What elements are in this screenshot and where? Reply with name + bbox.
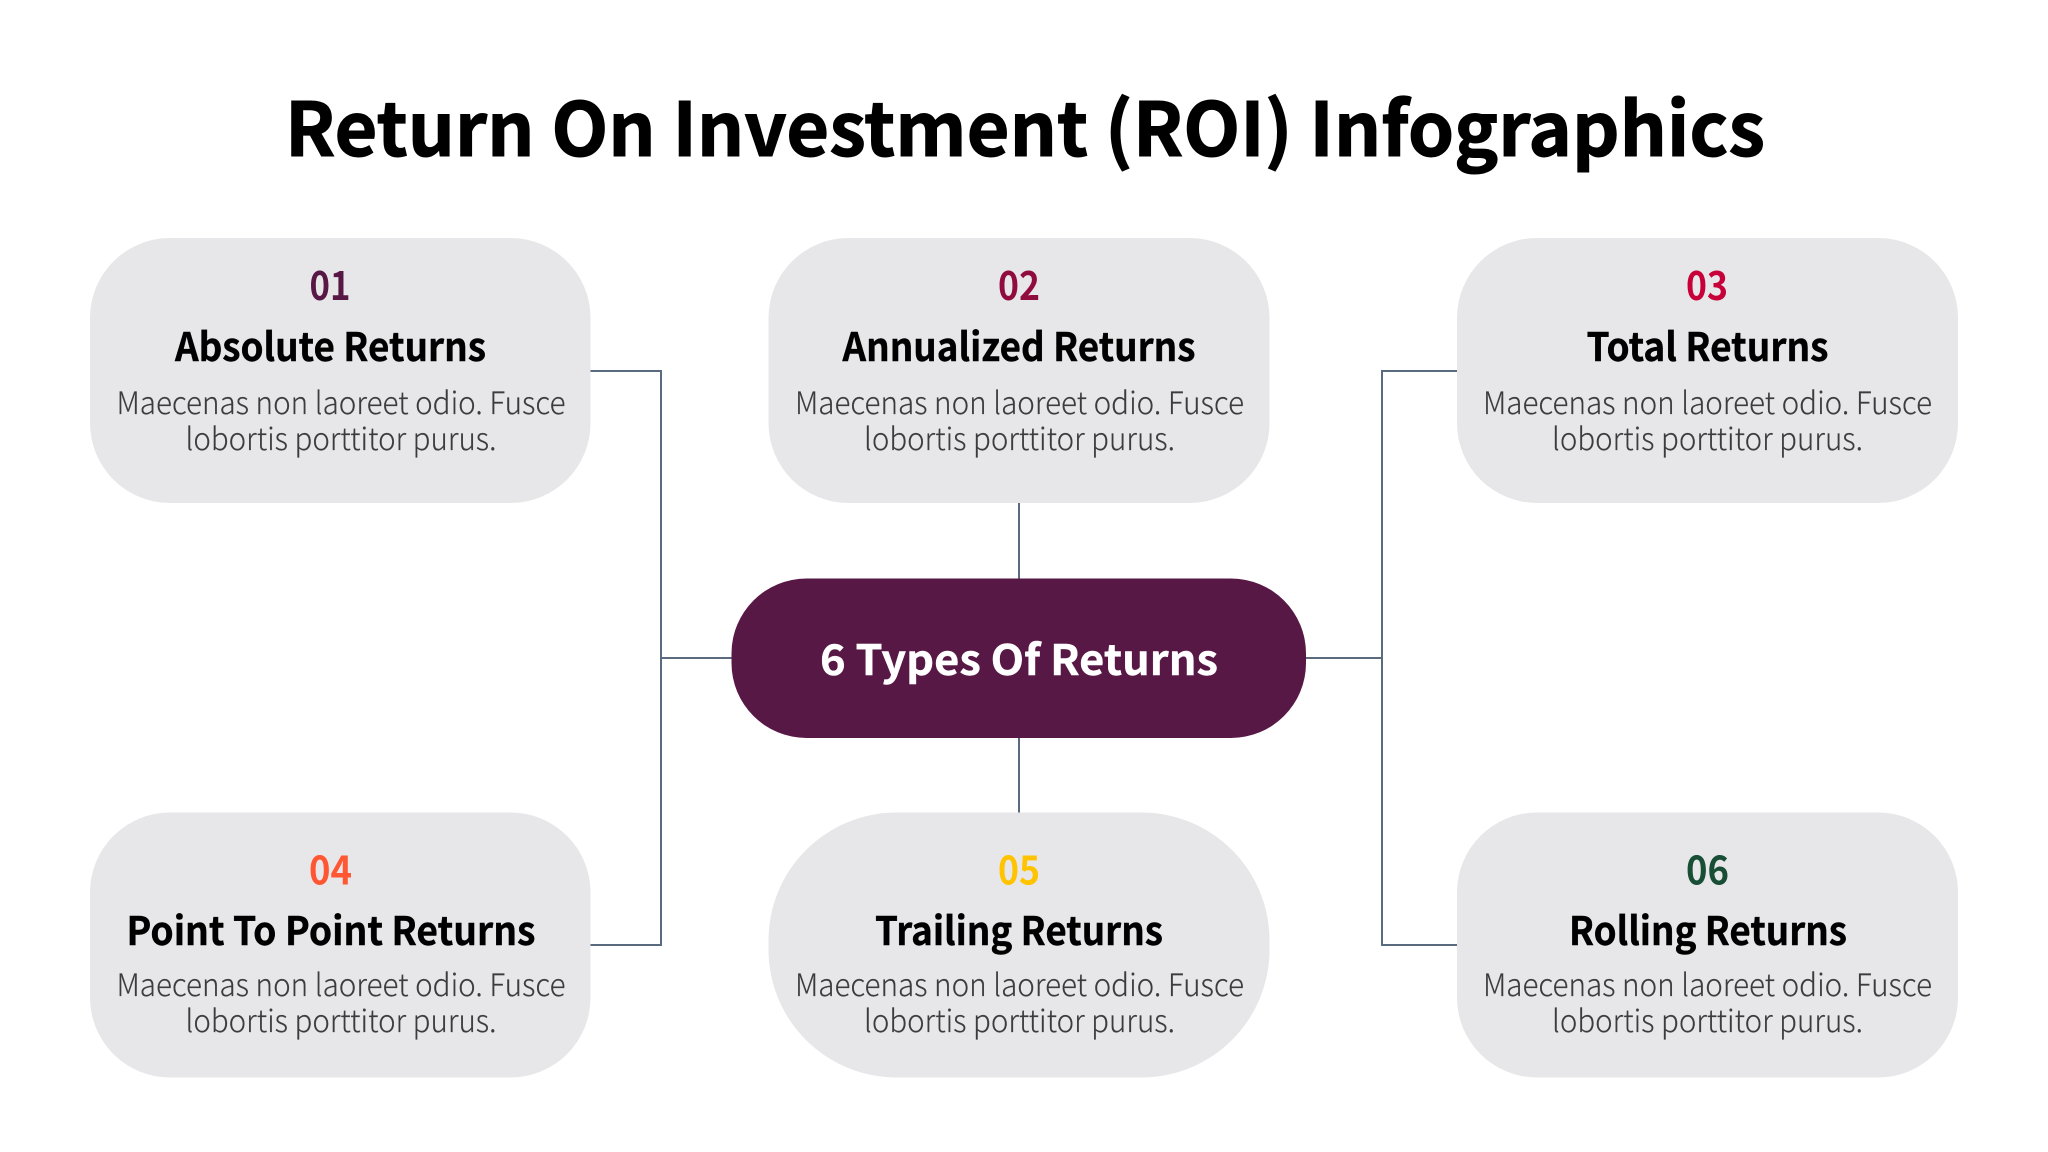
panel: 05 Trailing Returns xyxy=(768,812,1270,1078)
panel: 05 Trailing Returns: Trailing Returns xyxy=(875,901,1163,957)
panel: 01 Absolute Returns: Maecenas non laoreet odio. Fusce xyxy=(116,378,566,423)
panel: 01 Absolute Returns: lobortis porttitor purus. xyxy=(186,414,496,459)
panel: 04 Point To Point Returns xyxy=(90,812,590,1078)
connectors: left bracket xyxy=(590,371,732,945)
panel: 03 Total Returns: Maecenas non laoreet odio. Fusce xyxy=(1483,378,1932,423)
panel: 02 Annualized Returns xyxy=(768,238,1270,503)
panel: 03 Total Returns: Total Returns xyxy=(1586,317,1828,373)
panel: center 6 Types Of Returns: 6 Types Of Returns xyxy=(820,627,1218,688)
panel: 06 Rolling Returns: Maecenas non laoreet odio. Fusce xyxy=(1483,960,1932,1005)
connector: bottom vertical xyxy=(1018,738,1020,813)
panel: 01 Absolute Returns: Absolute Returns xyxy=(174,317,486,373)
panel: 06 Rolling Returns xyxy=(1457,812,1958,1078)
panel: 05 Trailing Returns: Maecenas non laoreet odio. Fusce xyxy=(795,960,1244,1005)
panel: 02 Annualized Returns: 02 xyxy=(998,254,1040,312)
connector: top vertical xyxy=(1018,503,1020,579)
panel: 05 Trailing Returns: lobortis porttitor purus. xyxy=(864,996,1175,1041)
panel: 06 Rolling Returns: 06 xyxy=(1686,838,1729,896)
panel: center 6 Types Of Returns xyxy=(732,578,1306,738)
panel: 06 Rolling Returns: lobortis porttitor purus. xyxy=(1552,996,1863,1041)
panel: 04 Point To Point Returns: Point To Point Returns xyxy=(126,901,536,957)
panel: 02 Annualized Returns: lobortis porttitor purus. xyxy=(864,414,1175,459)
panel: 04 Point To Point Returns: 04 xyxy=(309,838,352,896)
panel: 01 Absolute Returns: 01 xyxy=(310,254,350,312)
panel: 02 Annualized Returns: Maecenas non laoreet odio. Fusce xyxy=(795,378,1244,423)
panel: 04 Point To Point Returns: Maecenas non laoreet odio. Fusce xyxy=(116,960,566,1005)
panel: 05 Trailing Returns: 05 xyxy=(998,838,1040,896)
panel: 03 Total Returns: lobortis porttitor purus. xyxy=(1552,414,1863,459)
panel: 02 Annualized Returns: Annualized Returns xyxy=(842,317,1196,373)
panel: 04 Point To Point Returns: lobortis porttitor purus. xyxy=(186,996,496,1041)
title: Return On Investment (ROI) Infographics xyxy=(285,71,1765,178)
connectors: right bracket xyxy=(1306,371,1457,945)
panel: 06 Rolling Returns: Rolling Returns xyxy=(1569,901,1847,957)
panel: 01 Absolute Returns xyxy=(90,238,590,503)
panel: 03 Total Returns: 03 xyxy=(1686,254,1728,312)
panel: 03 Total Returns xyxy=(1457,238,1958,503)
